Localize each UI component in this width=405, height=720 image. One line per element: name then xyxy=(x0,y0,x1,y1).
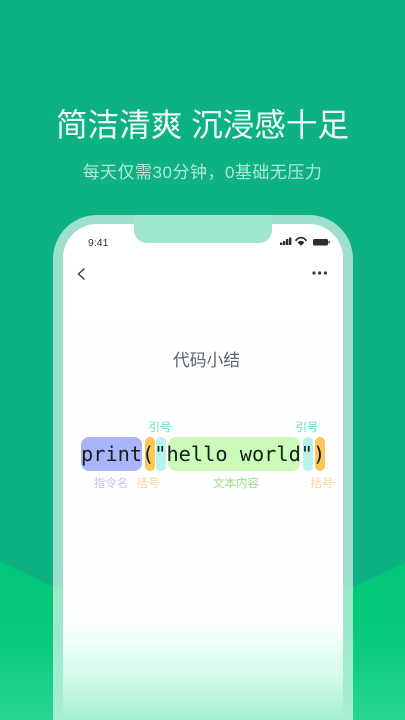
chip: right bracket xyxy=(315,437,325,471)
more menu icon xyxy=(312,271,327,275)
label: left bracket: 括号 xyxy=(136,478,160,490)
label: left quote: 引号 xyxy=(148,422,172,434)
chip: text content xyxy=(168,437,300,471)
code diagram xyxy=(81,421,334,490)
label: command name: 指令名 xyxy=(94,478,128,490)
chip: command xyxy=(81,437,142,471)
subtitle: 每天仅需30分钟，0基础无压力 xyxy=(83,163,322,182)
heading: code summary: 代码小结 xyxy=(173,351,240,370)
back arrow icon xyxy=(78,268,85,280)
chip: right quote xyxy=(303,437,313,471)
status bar time: 9:41 xyxy=(88,237,108,249)
chip: left bracket xyxy=(145,437,155,471)
label: right bracket: 括号 xyxy=(310,478,334,490)
status bar icons xyxy=(280,236,330,246)
phone screen xyxy=(63,224,343,720)
chip: left quote xyxy=(156,437,166,471)
code text: print("hello world") xyxy=(81,442,325,466)
label: text content: 文本内容 xyxy=(213,478,259,490)
label: right quote: 引号 xyxy=(296,422,318,434)
notch xyxy=(134,215,272,243)
phone frame xyxy=(53,215,353,720)
title: 简洁清爽 沉浸感十足 xyxy=(56,107,349,143)
